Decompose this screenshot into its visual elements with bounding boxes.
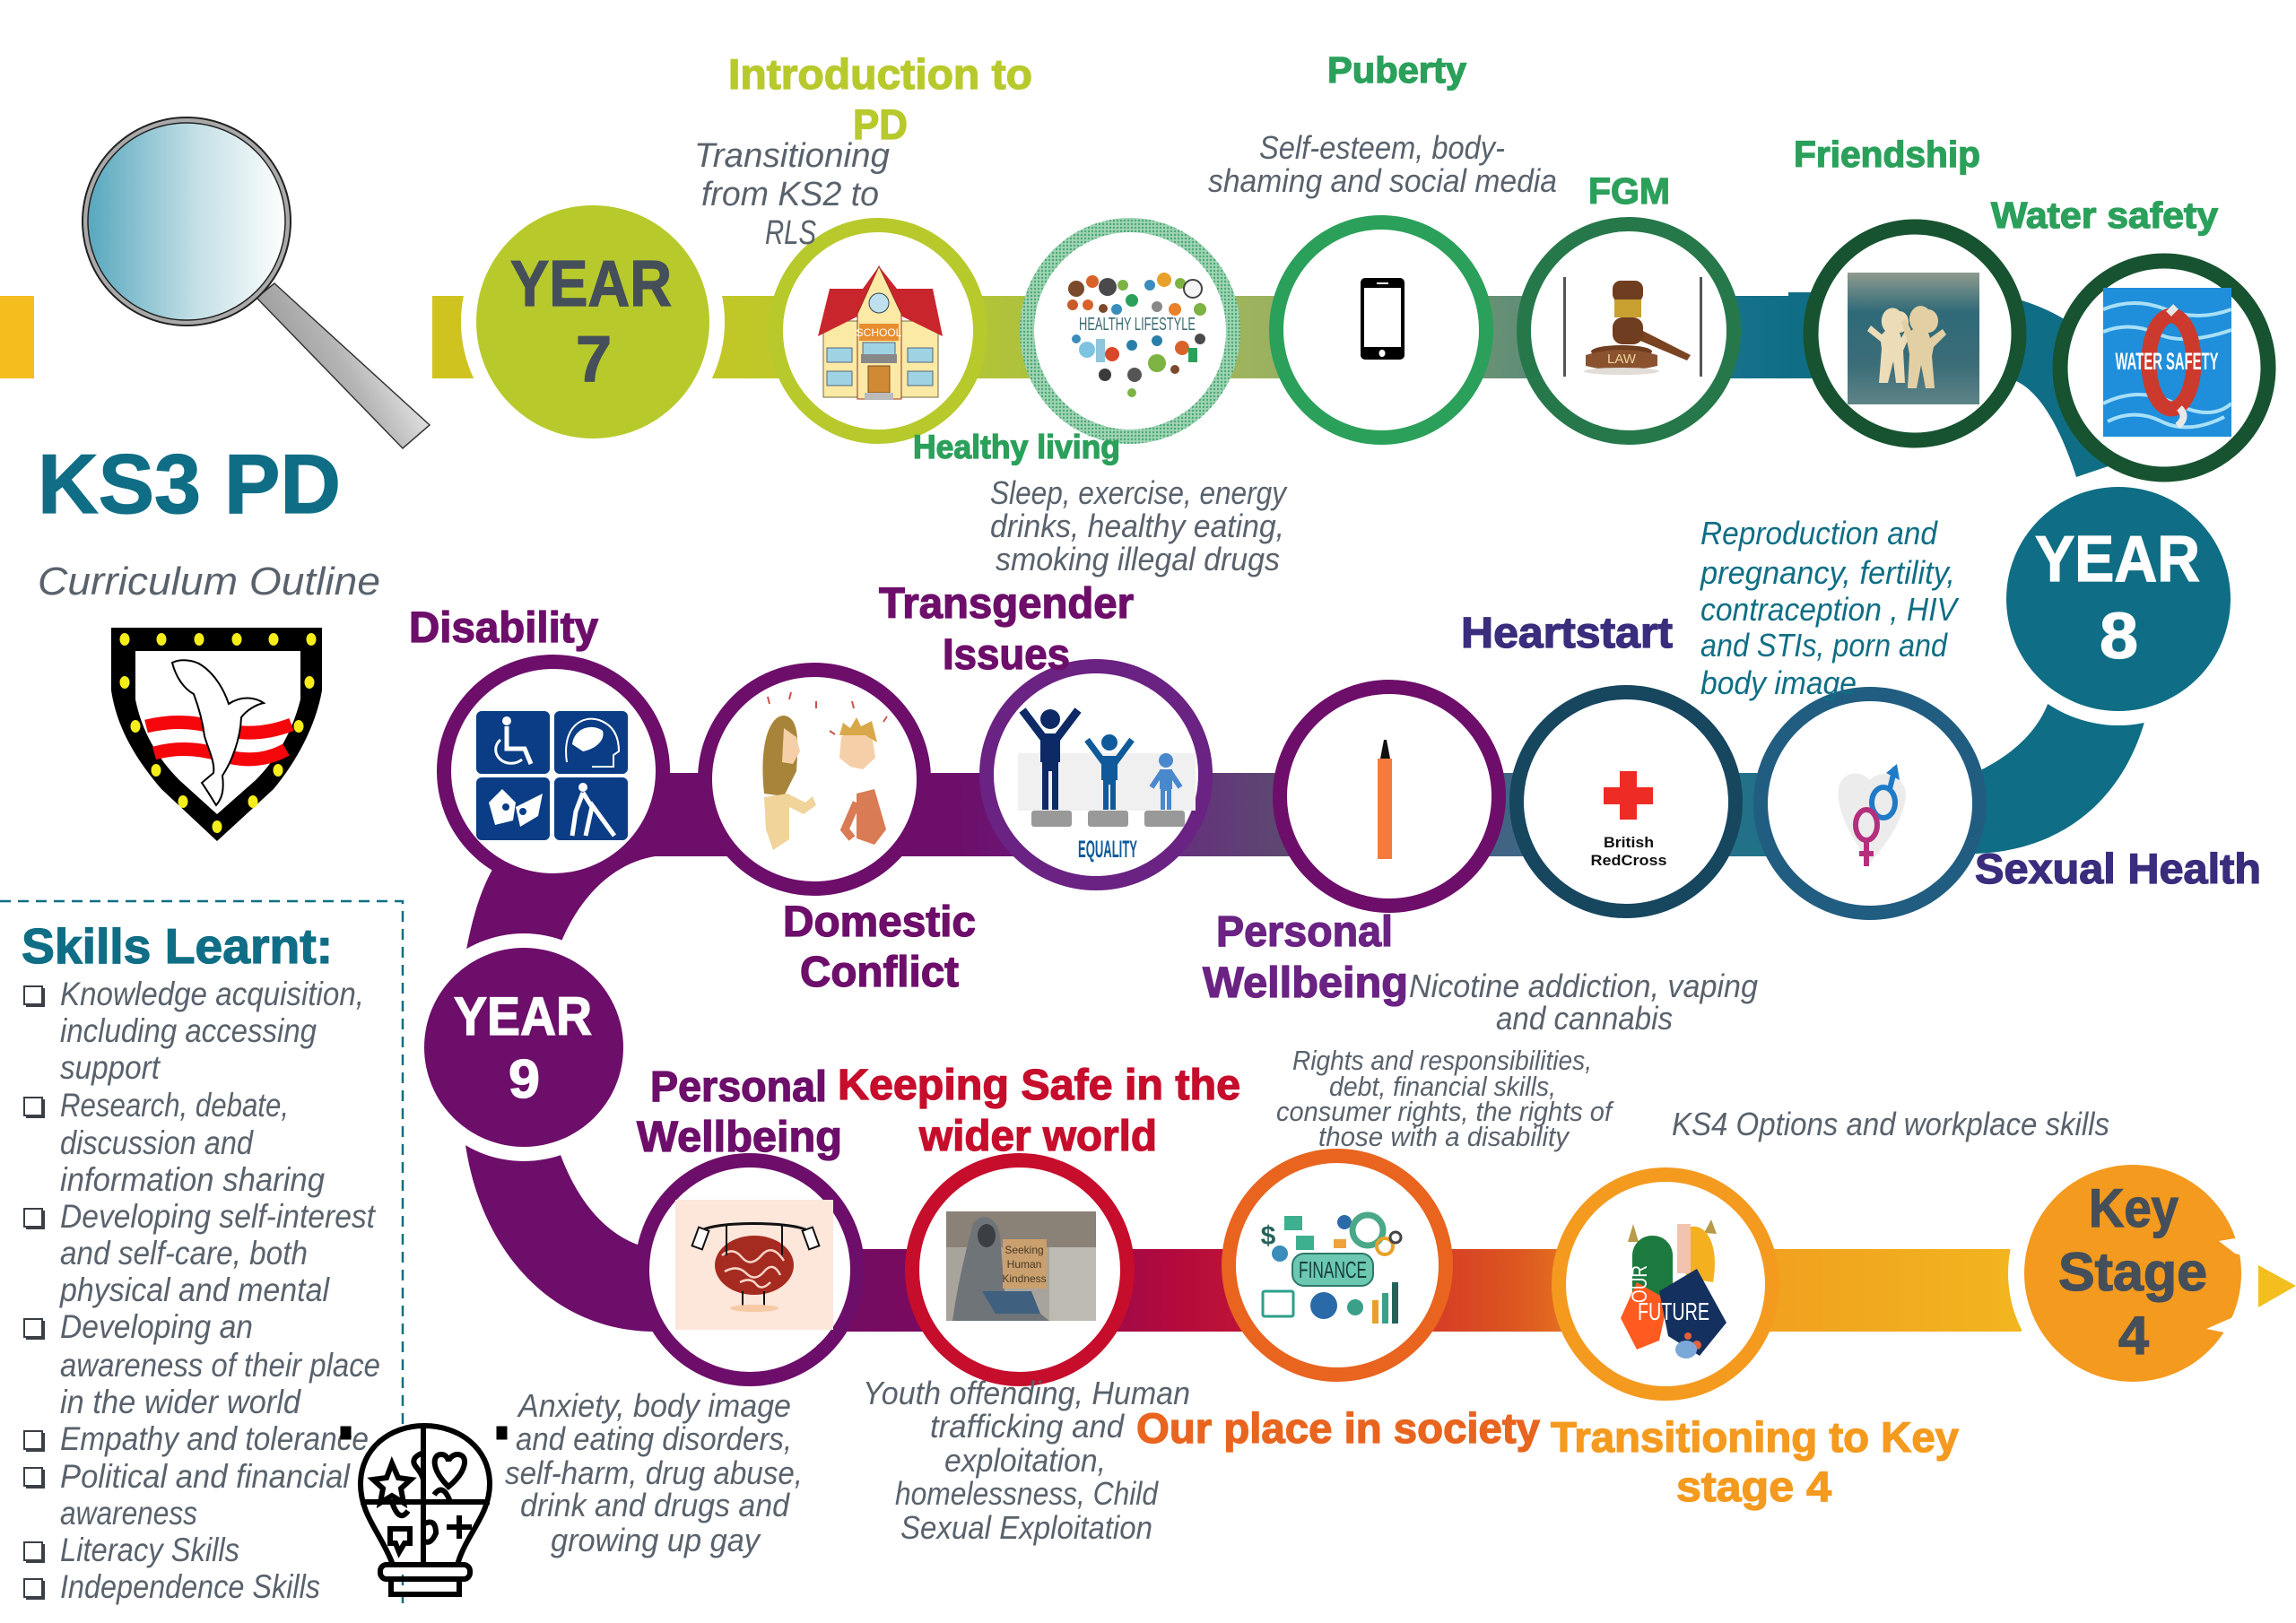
heading: personal wellbeing (year 9): Wellbeing (637, 1114, 842, 1161)
icon: water safety (2103, 288, 2231, 437)
heading: friendship: Friendship (1794, 134, 1980, 175)
heading: transgender issues: Issues (943, 631, 1070, 679)
text: sleep, exercise (990, 474, 1288, 577)
text: rights and responsibilities (1276, 1045, 1614, 1152)
icon: gavel (1563, 277, 1702, 377)
text: transitioning: from KS2 to (701, 176, 879, 213)
icon: british red cross: British (1604, 834, 1654, 851)
text: sleep, exercise: smoking illegal drugs (996, 541, 1280, 577)
text: youth offending: Sexual Exploitation (900, 1509, 1152, 1546)
circle: year 7: 7 (576, 324, 612, 395)
text: reproduction: and STIs, porn and (1700, 627, 1948, 664)
ring: FGM (1524, 224, 1734, 438)
icon: equality figures: EQUALITY (1078, 836, 1137, 863)
text: KS4 options: KS4 Options and workplace skills (1672, 1106, 2109, 1142)
heading: skills learnt: Skills Learnt: (22, 918, 333, 974)
bullet list: support (60, 1049, 161, 1086)
heading: water safety: Water safety (1991, 195, 2218, 236)
icon: our future collage: OUR (1628, 1265, 1652, 1303)
heading: personal wellbeing (year 8): Personal (1216, 908, 1393, 956)
bullet list: Empathy and tolerance (60, 1420, 369, 1457)
ring: transgender issues (987, 666, 1205, 883)
ring: disability (444, 662, 663, 881)
icon: british red cross (1591, 771, 1666, 869)
icon: homeless person photo: Kindness (1002, 1272, 1047, 1285)
icon: magnifying glass (83, 117, 430, 448)
ring: personal wellbeing brain (642, 1160, 857, 1379)
icon: school crest (111, 628, 322, 841)
text: reproduction: pregnancy, fertility, (1700, 554, 1955, 591)
icon: finance: $ (1261, 1221, 1276, 1251)
ring: personal wellbeing vaping (1280, 687, 1499, 906)
heading: FGM: FGM (1588, 170, 1670, 212)
icon: our future collage: FUTURE (1638, 1298, 1709, 1325)
title: KS3 PD: KS3 PD (38, 437, 341, 531)
heading: personal wellbeing (year 8): Wellbeing (1203, 959, 1408, 1007)
ring: sexual health (1761, 694, 1979, 913)
icon: homeless person photo: Seeking (1004, 1244, 1044, 1256)
icon: our future collage (1621, 1219, 1726, 1358)
heading: transitioning to key stage 4: stage 4 (1676, 1462, 1831, 1510)
bullet list: discussion and (60, 1124, 254, 1161)
text: anxiety: self-harm, drug abuse, (505, 1454, 803, 1491)
ring: domestic conflict (705, 670, 924, 889)
text: transitioning: RLS (765, 214, 816, 252)
heading: domestic conflict (783, 898, 976, 996)
icon: healthy lifestyle heart (1067, 273, 1206, 397)
ring: friendship (1811, 227, 2019, 440)
icon: paper friends (1848, 273, 1979, 404)
text: reproduction: Reproduction and (1700, 515, 1938, 551)
band: year 9 road (465, 771, 2022, 1332)
heading: keeping safe: Keeping Safe in the (838, 1062, 1240, 1109)
bullet list: awareness of their place (60, 1347, 380, 1384)
bullet list: and self-care, both (60, 1235, 308, 1271)
icon: finance: FINANCE (1299, 1256, 1367, 1283)
text: transitioning (694, 137, 890, 252)
text: youth offending: homelessness, Child (895, 1475, 1159, 1512)
ring: transitioning to key stage 4 (1559, 1175, 1772, 1393)
bullet list: awareness (60, 1495, 197, 1532)
heading: personal wellbeing (year 8) (1203, 908, 1408, 1007)
heading: keeping safe: wider world (918, 1113, 1157, 1160)
heading: personal wellbeing (year 9) (637, 1063, 842, 1161)
heading: domestic conflict: Domestic (783, 898, 976, 946)
bullet list: including accessing (60, 1012, 317, 1049)
icon: puzzle light bulb (342, 1426, 506, 1594)
icon: phone (1361, 278, 1405, 360)
heading: introduction to PD: Introduction to (728, 50, 1032, 98)
icon: vape (1378, 740, 1392, 859)
text: anxiety (505, 1387, 803, 1558)
text: rights and responsibilities: consumer rights, the rights of (1276, 1096, 1614, 1127)
ring: puberty (1276, 222, 1486, 438)
text: anxiety: and eating disorders, (516, 1420, 792, 1457)
icon: homeless person photo: Human (1007, 1258, 1041, 1271)
heading: sexual health: Sexual Health (1975, 845, 2261, 892)
icon: school building: SCHOOL (857, 326, 902, 339)
circle: key stage 4: Stage (2058, 1242, 2207, 1302)
bullet list: in the wider world (60, 1384, 301, 1420)
text: sleep, exercise: Sleep, exercise, energy (990, 474, 1288, 511)
icon: school building (818, 266, 943, 400)
band: year 7 road (0, 292, 2161, 477)
text: transitioning: Transitioning (694, 137, 890, 175)
bullet list: Research, debate, (60, 1087, 289, 1124)
icon: brain lifting weights (675, 1200, 833, 1330)
text: nicotine (1409, 968, 1758, 1037)
text: youth offending: trafficking and (930, 1408, 1125, 1445)
heading: transitioning to key stage 4 (1551, 1413, 1959, 1510)
text: rights and responsibilities: Rights and responsibilities, (1292, 1045, 1592, 1076)
ring: healthy living (1027, 225, 1233, 437)
text: reproduction (1700, 515, 1960, 701)
circle: year 9 (410, 933, 638, 1161)
panel: skills learnt (0, 901, 403, 1605)
icon: gender symbols (1839, 764, 1906, 866)
heading: transgender issues (879, 580, 1134, 679)
ring: keeping safe (912, 1160, 1127, 1379)
ring: introduction to PD (776, 225, 980, 437)
circle: key stage 4: 4 (2118, 1306, 2150, 1366)
icon: arguing couple (762, 692, 887, 850)
circle: year 8: YEAR (2035, 524, 2200, 595)
icon: equality figures (1018, 709, 1196, 863)
heading: transitioning to key stage 4: Transitioning to Key (1551, 1413, 1959, 1461)
icon: disability tiles (476, 711, 628, 840)
heading: transgender issues: Transgender (879, 580, 1134, 628)
heading: introduction to PD (728, 50, 1032, 148)
text: reproduction: contraception , HIV (1700, 591, 1960, 628)
bullet list: Literacy Skills (60, 1532, 239, 1568)
bullet list: Independence Skills (60, 1568, 320, 1605)
text: youth offending (863, 1375, 1190, 1546)
text: reproduction: body image (1700, 664, 1857, 701)
heading: our place in society: Our place in society (1136, 1404, 1540, 1452)
circle: year 9: 9 (509, 1049, 540, 1109)
heading: personal wellbeing (year 9): Personal (650, 1063, 827, 1111)
text: nicotine: Nicotine addiction, vaping (1409, 968, 1758, 1004)
heading: puberty: Puberty (1327, 49, 1466, 91)
text: self-esteem: shaming and social media (1208, 162, 1557, 199)
heading: disability: Disability (409, 604, 598, 652)
ring: our place in society (1229, 1156, 1446, 1375)
text: youth offending: Youth offending, Human (863, 1375, 1190, 1411)
bullet list: Political and financial (60, 1458, 352, 1495)
circle: year 7 (461, 190, 725, 454)
heading: keeping safe (838, 1062, 1240, 1160)
icon: healthy lifestyle heart: HEALTHY LIFESTYLE (1079, 315, 1196, 334)
bullet list: Knowledge acquisition, (60, 976, 364, 1012)
text: youth offending: exploitation, (944, 1442, 1106, 1479)
text: self-esteem (1208, 129, 1557, 199)
circle: year 7: YEAR (510, 248, 672, 320)
text: anxiety: growing up gay (551, 1522, 761, 1558)
bullet list: Developing an (60, 1308, 253, 1345)
text: self-esteem: Self-esteem, body- (1259, 129, 1505, 166)
bullet list: Developing self-interest (60, 1198, 377, 1235)
text: rights and responsibilities: debt, financial skills, (1329, 1071, 1556, 1102)
icon: gavel: LAW (1607, 352, 1637, 367)
text: anxiety: drink and drugs and (520, 1487, 790, 1523)
bullet list: physical and mental (59, 1271, 331, 1308)
text: sleep, exercise: drinks, healthy eating, (990, 508, 1284, 544)
heading: introduction to PD: PD (853, 100, 908, 148)
bullet list: information sharing (60, 1161, 325, 1198)
circle: key stage 4: Key (2089, 1178, 2179, 1238)
heading: healthy living: Healthy living (913, 429, 1120, 465)
band: year 8 road (556, 699, 2148, 856)
ring: heartstart (1517, 692, 1735, 911)
heading: heartstart: Heartstart (1461, 610, 1673, 657)
circle: year 9: YEAR (454, 986, 592, 1046)
circle: year 8 (1992, 473, 2245, 725)
subtitle: curriculum outline: Curriculum Outline (38, 560, 380, 603)
ring: water safety (2060, 261, 2268, 474)
icon: british red cross: RedCross (1591, 852, 1666, 869)
heading: domestic conflict: Conflict (800, 949, 959, 996)
icon: homeless person photo (946, 1211, 1096, 1321)
circle: key stage 4 (2008, 1149, 2257, 1398)
text: rights and responsibilities: those with a disability (1318, 1121, 1570, 1152)
arrow: end of road (2258, 1265, 2296, 1307)
icon: finance (1261, 1215, 1401, 1324)
bullet list (24, 976, 380, 1605)
circle: year 8: 8 (2100, 601, 2138, 673)
text: anxiety: Anxiety, body image (517, 1387, 791, 1424)
text: nicotine: and cannabis (1496, 1000, 1673, 1037)
